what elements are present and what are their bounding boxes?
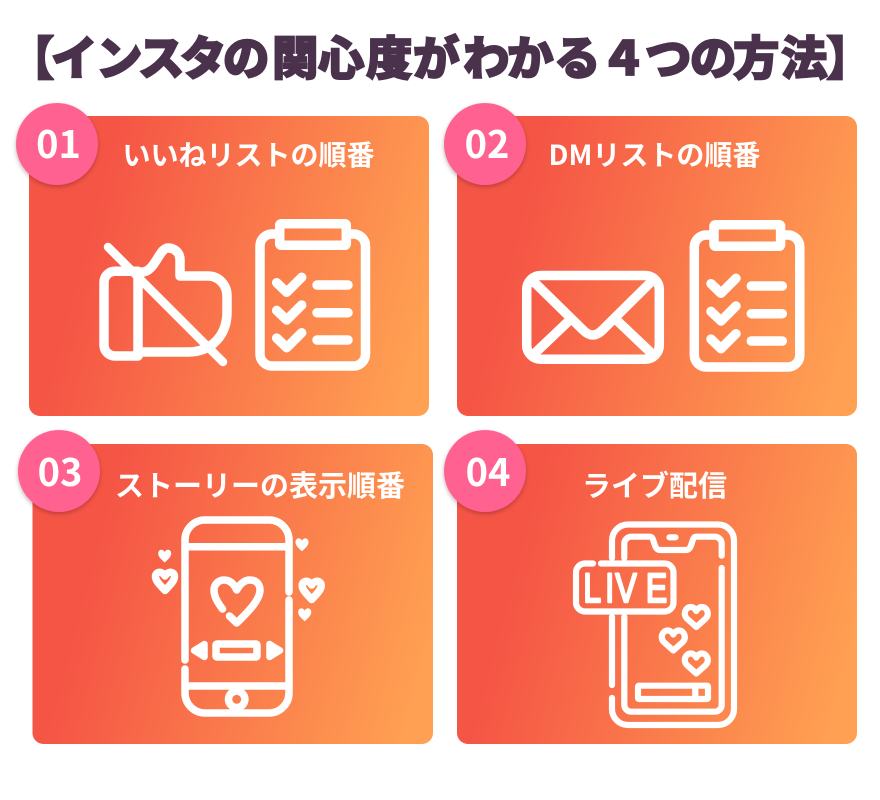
heading 04: ライブ配信 [582,463,727,505]
number badge 03 [18,430,100,512]
icon: smartphone with live badge [576,524,734,725]
number badge 02: 02 [465,114,509,169]
icon: envelope [527,276,659,359]
number badge 01: 01 [36,114,81,169]
icon: smartphone with heart [185,520,289,713]
icon: checklist clipboard [260,224,366,366]
heading 02: DMリストの順番 [549,134,760,174]
number badge 04: 04 [466,442,510,497]
heading 01: いいねリストの順番 [122,134,375,174]
icon: crossed-out thumbs up [104,247,227,362]
number badge 03: 03 [38,442,82,497]
title: 【インスタの関心度がわかる４つの方法】 [8,22,872,89]
panel 02 background [457,116,857,416]
icon: LIVE label: LIVE [583,565,667,611]
panel: 01 likes list order [16,103,429,416]
panel: 03 story display order [18,430,433,744]
number badge 02 [444,103,526,185]
panel 01 background [29,116,429,416]
panel 04 background [457,444,857,744]
panel 03 background [32,444,433,744]
icon: checklist clipboard [694,225,800,367]
number badge 04 [444,430,526,512]
heading 03: ストーリーの表示順番 [115,463,405,505]
number badge 01 [16,103,98,185]
panel: 04 live streaming [444,430,857,744]
icon: floating hearts [156,538,321,621]
panel: 02 DM list order [444,103,857,416]
icon: outlined hearts [662,607,708,674]
